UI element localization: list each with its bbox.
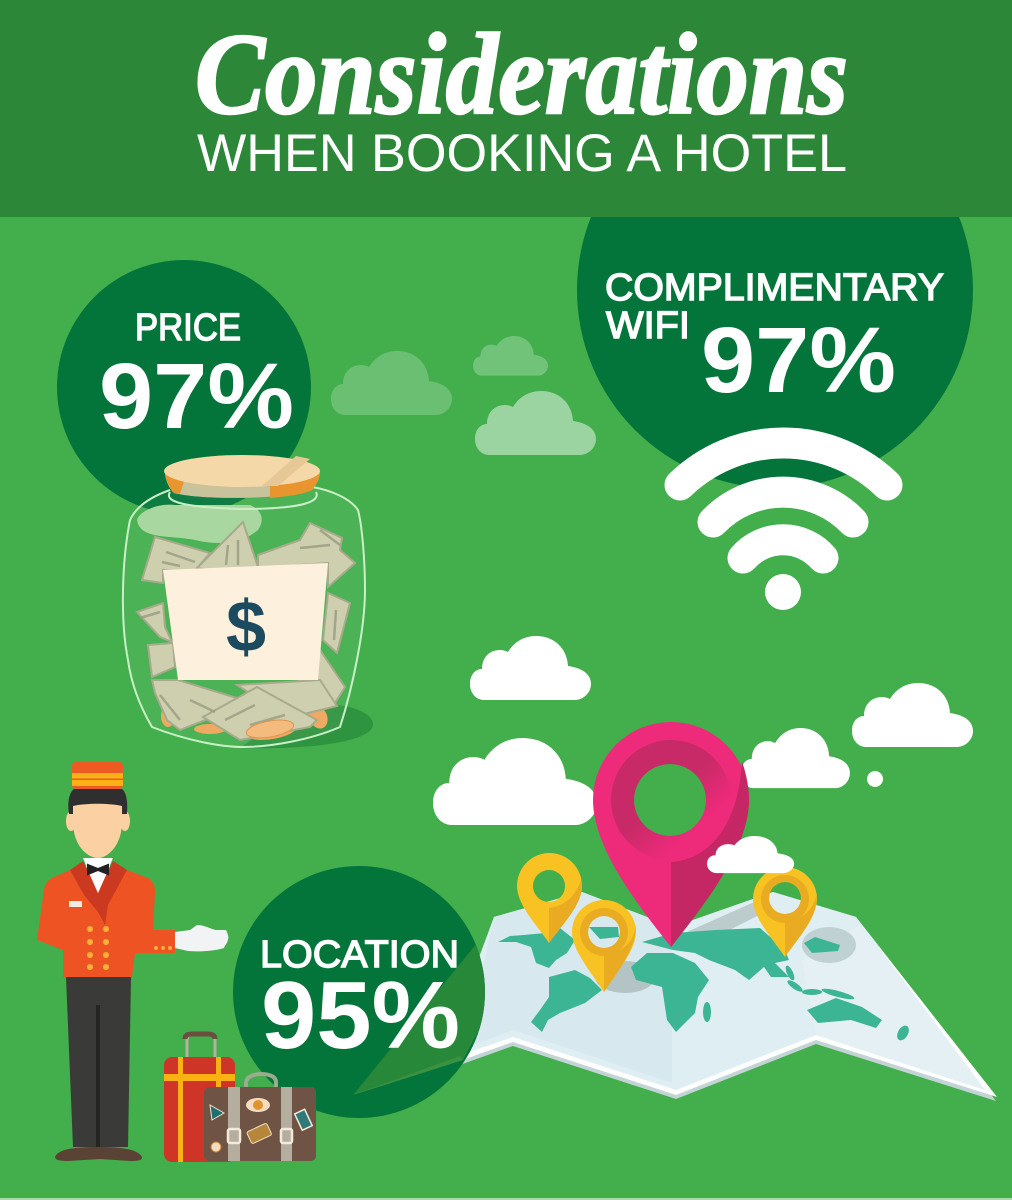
price value: 97% bbox=[99, 344, 294, 448]
icon: yellow pin right bbox=[753, 867, 817, 957]
panel: price circle bbox=[57, 260, 311, 514]
hat bbox=[72, 762, 123, 789]
coin front bbox=[245, 717, 295, 741]
illustration: folded world map bbox=[440, 892, 997, 1101]
jar label bbox=[163, 563, 328, 680]
subtitle: WHEN BOOKING A HOTEL bbox=[197, 124, 847, 183]
wifi label line 1: COMPLIMENTARY bbox=[605, 267, 944, 309]
illustration: bellhop bbox=[37, 762, 228, 1161]
title: Considerations bbox=[195, 11, 848, 139]
icon: pink location pin bbox=[593, 722, 749, 947]
white clouds bbox=[433, 636, 973, 825]
head bbox=[73, 800, 122, 858]
jar lid bbox=[165, 470, 320, 498]
panel: header band bbox=[0, 0, 1012, 217]
coins bbox=[161, 702, 331, 743]
location value: 95% bbox=[261, 962, 460, 1069]
glove bbox=[175, 925, 228, 951]
shoes bbox=[55, 1147, 142, 1161]
dollar sign: $ bbox=[226, 587, 266, 667]
jacket buttons bbox=[87, 926, 172, 970]
wifi label line 2: WIFI bbox=[606, 305, 690, 347]
wifi value: 97% bbox=[701, 308, 896, 412]
small cloud over map bbox=[707, 836, 794, 873]
pin shadows bbox=[595, 961, 655, 993]
translucent clouds bbox=[331, 336, 596, 455]
illustration: red suitcase bbox=[164, 1034, 235, 1162]
jar glass bbox=[123, 487, 365, 747]
jar highlight bbox=[137, 505, 262, 543]
shirt bbox=[83, 858, 113, 893]
continents bbox=[498, 927, 911, 1042]
banknote shading bbox=[140, 530, 340, 725]
illustration: money jar bbox=[123, 455, 373, 748]
location label: LOCATION bbox=[260, 934, 459, 976]
jar neck bbox=[169, 492, 317, 509]
text: location stat bbox=[260, 934, 460, 1069]
lapels bbox=[70, 861, 127, 925]
icon: yellow pin centre bbox=[572, 900, 636, 992]
icon: yellow pin left bbox=[517, 853, 582, 943]
banknotes bbox=[137, 522, 355, 740]
price label: PRICE bbox=[135, 307, 241, 349]
panel: complimentary wifi circle bbox=[577, 92, 973, 488]
jacket bbox=[37, 870, 175, 977]
text: complimentary wifi stat bbox=[605, 267, 944, 412]
panel: location circle bbox=[233, 866, 495, 1118]
hair bbox=[68, 789, 127, 814]
icon: wifi signal bbox=[680, 443, 887, 610]
trousers bbox=[66, 977, 131, 1147]
map flap over circle bbox=[353, 943, 495, 1095]
jar shadow bbox=[240, 704, 373, 748]
illustration: brown suitcase bbox=[204, 1074, 316, 1161]
name tag bbox=[69, 901, 82, 907]
bow tie bbox=[88, 865, 108, 874]
